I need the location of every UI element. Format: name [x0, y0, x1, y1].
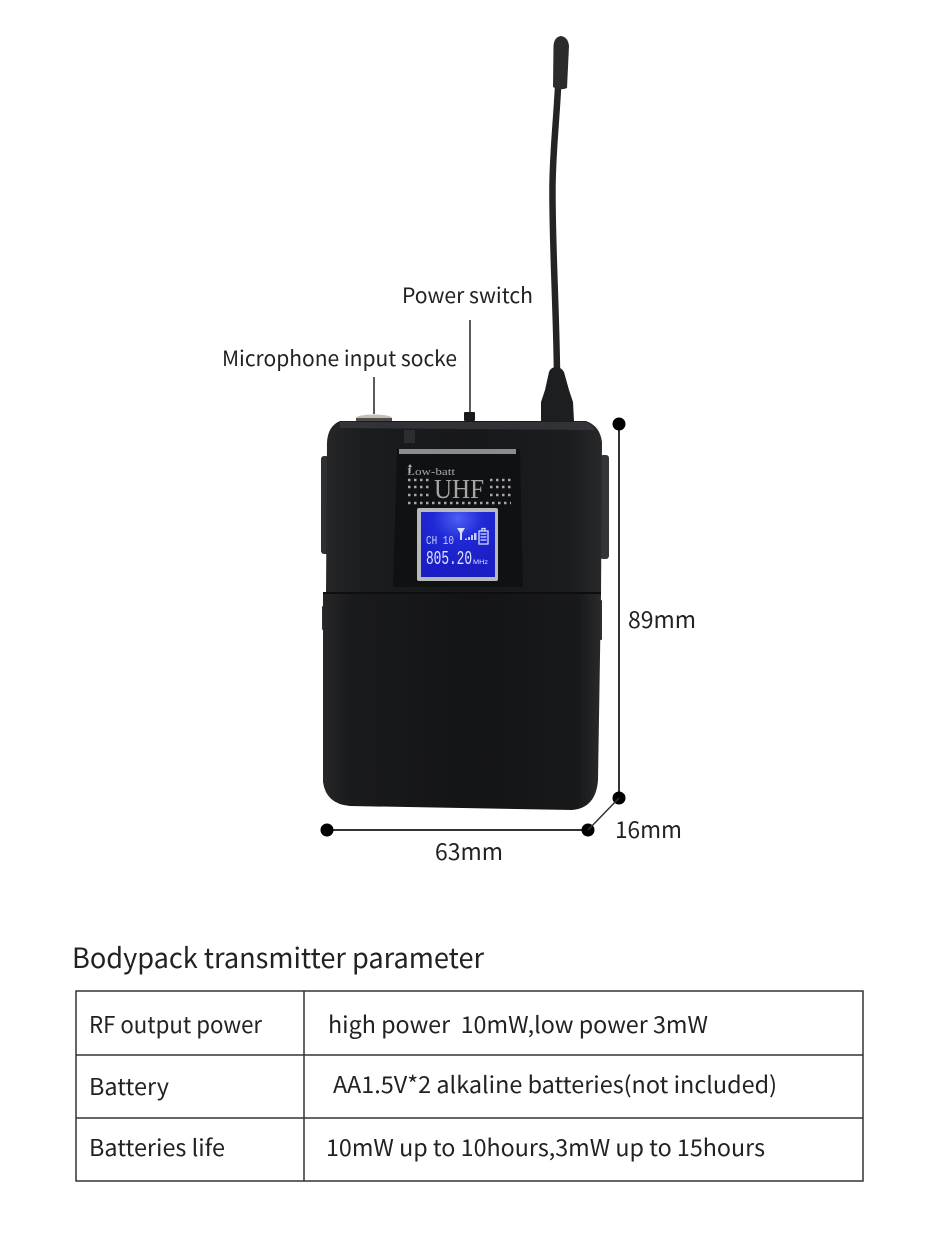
power switch knob: [464, 412, 475, 421]
row: batteries life: 10mW up to 10hours,3mW up to 15hours: [326, 1129, 765, 1163]
dimension: 89mm height: [612, 418, 696, 804]
bodypack transmitter: [321, 421, 609, 810]
antenna: [541, 36, 574, 421]
upper body: [326, 421, 602, 596]
row: battery: [89, 1066, 777, 1102]
row: RF output power: RF output power: [89, 1006, 262, 1040]
row: batteries life: Batteries life: [89, 1129, 225, 1163]
lcd screen: MHz: [473, 560, 488, 566]
row: battery: AA1.5V*2 alkaline batteries(not included): [333, 1066, 777, 1100]
lower battery cover: [323, 594, 601, 810]
dotted pattern: [408, 480, 512, 503]
lcd screen: CH 10: [426, 534, 454, 548]
callout: microphone input socket: Microphone input socke: [222, 343, 457, 373]
small logo mark: [404, 430, 415, 443]
row: batteries life: [89, 1129, 765, 1163]
callout: power switch: Power switch: [402, 280, 533, 310]
low battery arrow: [408, 464, 412, 473]
UHF label: UHF: [434, 474, 484, 504]
side clips: [321, 455, 609, 640]
row: RF output power: [89, 1006, 708, 1040]
low-batt label: Low-batt: [407, 466, 455, 478]
dimension: 63mm width: [320, 824, 594, 867]
dimension: 16mm depth: 16mm: [615, 811, 682, 845]
display faceplate: [393, 449, 523, 587]
dimension: 89mm height: 89mm: [628, 601, 696, 635]
lcd screen: [417, 508, 498, 581]
table grid: [76, 991, 863, 1181]
lcd screen: 805.20: [426, 548, 472, 570]
parameter table: [76, 991, 863, 1181]
dimension: 16mm depth: [588, 798, 682, 845]
row: battery: Battery: [89, 1068, 169, 1102]
dimension: 63mm width: 63mm: [435, 833, 503, 867]
microphone input socket: [356, 414, 392, 422]
heading: Bodypack transmitter parameter: [72, 937, 484, 977]
callout: power switch: [402, 280, 533, 412]
row: RF output power: high power 10mW,low power 3mW: [328, 1006, 708, 1040]
